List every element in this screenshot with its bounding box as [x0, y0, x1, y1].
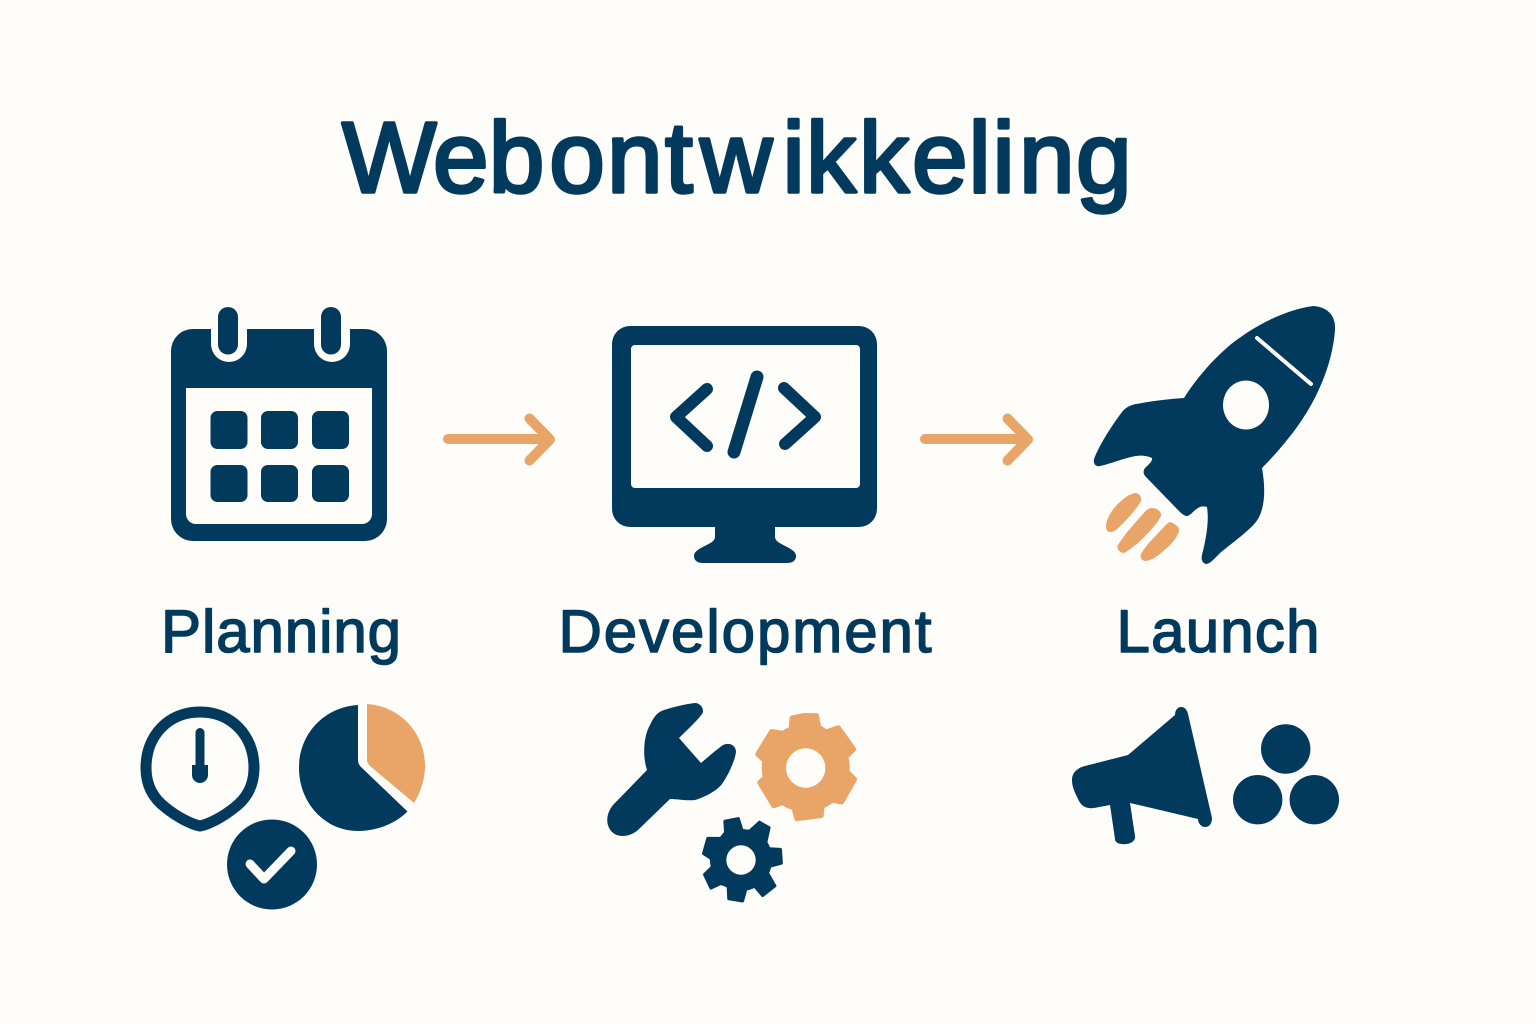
- arrow: development to launch: [925, 418, 1028, 460]
- icon: calendar: [171, 307, 387, 541]
- icon: pie chart: [299, 704, 425, 831]
- icon: rocket: [1094, 306, 1335, 564]
- icon: monitor with code: [612, 326, 877, 563]
- icon: clock: [146, 712, 254, 826]
- label: Launch: Launch: [1116, 598, 1320, 665]
- title: Webontwikkeling: [342, 102, 1132, 214]
- icon: check badge: [227, 820, 317, 910]
- icon: audience dots: [1233, 724, 1339, 824]
- label: Planning: Planning: [161, 598, 401, 665]
- icon: wrench: [607, 703, 736, 836]
- arrow: planning to development: [448, 418, 550, 460]
- icon: orange gear: [758, 716, 854, 818]
- icon: megaphone: [1072, 707, 1212, 844]
- label: Development: Development: [558, 598, 932, 665]
- icon: navy gear: [703, 819, 781, 901]
